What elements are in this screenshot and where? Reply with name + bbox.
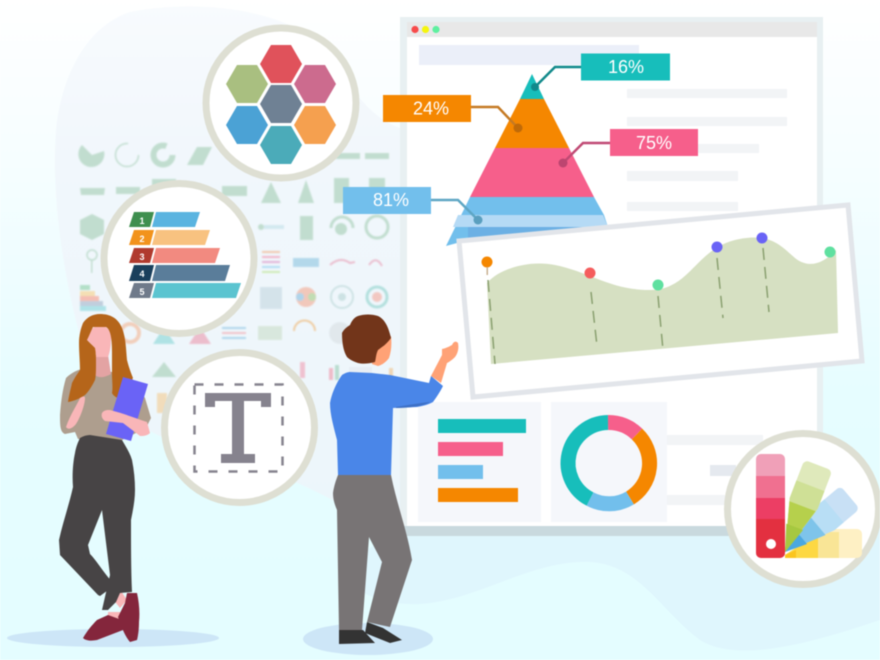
callout 75% [558, 129, 698, 168]
collar [349, 367, 372, 375]
circle: numbered list icon [104, 184, 254, 334]
panel: bar chart [418, 402, 541, 522]
swatch fan blue [775, 486, 860, 563]
left shoe [339, 630, 375, 644]
front shoe [83, 615, 123, 641]
pyramid top tier [520, 74, 544, 99]
circle: hexagon icon [206, 28, 356, 178]
ground shadow [303, 623, 433, 655]
right forearm [102, 410, 150, 436]
window body [407, 37, 817, 526]
faint row 7 icons [152, 362, 393, 413]
ankle [108, 585, 127, 608]
green area [487, 238, 838, 364]
swatch fan yellow [785, 529, 862, 558]
callout 24%: 24% [413, 98, 449, 118]
shirt [60, 368, 151, 440]
faint row 3 icons [80, 214, 388, 240]
trousers [59, 435, 135, 610]
list row 5: 5 [139, 287, 145, 297]
callout 16%: 16% [608, 57, 644, 77]
woman figure [7, 314, 219, 647]
trousers [333, 475, 412, 630]
faint row 2 icons [80, 178, 385, 203]
raised forearm and hand [431, 342, 458, 383]
swatch strip red [756, 454, 785, 558]
neck [95, 355, 111, 377]
pyramid pink tier [470, 148, 594, 197]
pyramid blue tier [446, 197, 608, 246]
list row 5 [129, 283, 241, 298]
hair [68, 314, 133, 402]
list row 2: 2 [139, 234, 145, 244]
swatch fan green [771, 460, 832, 557]
callout 81%: 81% [373, 190, 409, 210]
horizontal bars [438, 419, 526, 433]
pyramid orange tier [495, 99, 569, 148]
background blob: lower right [340, 520, 880, 650]
text placeholder lines [627, 89, 787, 505]
area chart card [459, 205, 862, 397]
sleeve crease [396, 402, 430, 408]
folder [106, 377, 148, 441]
callout 75%: 75% [636, 133, 672, 153]
dashed selection frame [194, 384, 282, 472]
ground shadow [7, 629, 219, 647]
translucent card overlap [453, 215, 608, 227]
right shoe [365, 622, 402, 643]
callout 81% [343, 187, 482, 224]
faint row 6 icons [121, 320, 351, 344]
list row 2 [129, 230, 210, 245]
heading placeholder [419, 45, 639, 65]
left forearm [66, 396, 85, 429]
card frame [459, 205, 862, 397]
hair [342, 314, 391, 364]
browser window [400, 17, 823, 536]
sweater [330, 372, 443, 475]
hexagon cluster [226, 45, 336, 164]
letter T [205, 393, 271, 463]
background blob: upper left [55, 6, 400, 540]
pyramid chart [446, 74, 608, 246]
faint template icon grid [78, 144, 393, 413]
callout 24% [383, 95, 522, 132]
back shoe [118, 593, 139, 642]
faint row 5 icons [80, 285, 387, 311]
face [372, 336, 391, 366]
circle: text tool icon [164, 352, 314, 502]
window title bar [407, 22, 817, 37]
window control dots [411, 26, 440, 33]
list row 1 [129, 212, 200, 227]
circle: colour palette icon [728, 434, 878, 584]
list row 4: 4 [139, 269, 145, 279]
face [87, 326, 111, 357]
faint row 1 icons [78, 144, 389, 167]
list row 3: 3 [139, 252, 145, 262]
panel: donut chart [551, 402, 667, 522]
donut segments [568, 422, 650, 504]
list row 4 [129, 265, 230, 281]
data points [482, 232, 836, 290]
list row 1: 1 [139, 216, 145, 226]
callout 16% [531, 54, 670, 91]
faint row 4 icons [87, 250, 382, 273]
window frame [400, 17, 823, 536]
man figure [303, 314, 458, 655]
list row 3 [129, 248, 220, 263]
dashed drop lines [488, 248, 769, 364]
